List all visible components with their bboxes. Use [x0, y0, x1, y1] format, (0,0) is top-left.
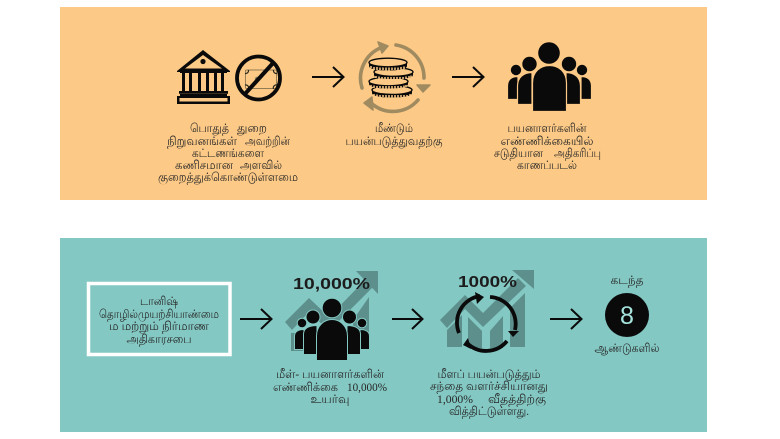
heading: 1000%: 1000%	[458, 274, 517, 291]
badge: 8: 8	[620, 302, 634, 330]
text: 1000% caption: வித்திட்டுள்ளது.	[449, 404, 529, 419]
coin stack	[369, 58, 413, 98]
text: beneficiaries caption: எண்ணிக்கையில்	[500, 134, 594, 148]
text: public sector caption: நிறுவனங்கள்	[167, 134, 237, 149]
text: reuse caption: மீண்டும்	[375, 121, 413, 135]
callout: Danish authority box: ம மற்றும் நிர்மாண	[109, 319, 210, 334]
text: reuse caption: பயன்படுத்துவதற்கு	[346, 134, 443, 149]
text: public sector caption	[158, 121, 298, 185]
text: years label: ஆண்டுகளில்	[594, 341, 660, 355]
text: public sector caption: கட்டணங்களை	[192, 146, 264, 160]
text: beneficiaries caption: பயனாளர்களின்	[508, 121, 587, 135]
text: 10,000% caption: எண்ணிக்கை	[273, 380, 338, 394]
text: 1000% caption: வீதத்திற்கு	[488, 392, 546, 406]
text: public sector caption: குறைத்துக்கொண்டுள்ளமை	[158, 170, 298, 185]
text: public sector caption: அவற்றின்	[245, 134, 290, 148]
badge: 8	[605, 293, 649, 337]
icon: people group	[508, 42, 592, 112]
text: public sector caption: கணிசமான	[175, 158, 233, 172]
text: 10,000% caption: 10,000%	[347, 380, 387, 394]
heading: 10,000%: 10,000%	[293, 276, 370, 293]
icon: growth chart with cycle	[440, 270, 534, 351]
text: 1000% caption	[430, 367, 548, 419]
arrow: top second	[452, 67, 484, 87]
text: public sector caption: பொதுத்	[190, 121, 229, 136]
icon: bank building	[177, 50, 230, 104]
text: beneficiaries caption: அதிகரிப்பு	[554, 146, 601, 160]
arrow: bottom first	[240, 309, 272, 329]
text: 10,000% caption: மீள்- பயனாளர்களின்	[276, 367, 384, 381]
icon: recycling coins	[361, 42, 430, 111]
text: 1000% caption: மீளப் பயன்படுத்தும்	[438, 367, 540, 382]
text: beneficiaries caption: சடுதியான	[494, 146, 543, 160]
callout: Danish authority box	[88, 284, 230, 354]
icon: growth chart with people	[285, 271, 378, 360]
text: public sector caption: அளவில்	[240, 158, 282, 172]
text: 1000% caption: 1,000%	[437, 392, 473, 406]
text: past label: கடந்த	[610, 273, 644, 287]
arrow: top first	[312, 67, 344, 87]
icon: no money sign	[237, 56, 280, 100]
callout: Danish authority box: தொழில்முயற்சியாண்மை	[99, 307, 219, 322]
text: 10,000% caption: உயர்வு	[310, 392, 350, 406]
text: reuse caption	[346, 121, 443, 149]
text: 1000% caption: சந்தை வளர்ச்சியானது	[430, 379, 548, 394]
arrow: bottom second	[392, 309, 422, 329]
panel: bottom teal	[60, 238, 707, 432]
panel: top orange	[60, 7, 707, 200]
text: public sector caption: துறை	[237, 121, 267, 136]
arrow: bottom third	[550, 309, 582, 329]
callout: Danish authority box: டானிஷ்	[140, 294, 178, 308]
text: beneficiaries caption: காணப்படல்	[517, 158, 577, 172]
text: 10,000% caption	[273, 367, 387, 406]
text: beneficiaries caption	[494, 121, 601, 172]
callout: Danish authority box: அதிகாரசபை	[126, 332, 192, 346]
